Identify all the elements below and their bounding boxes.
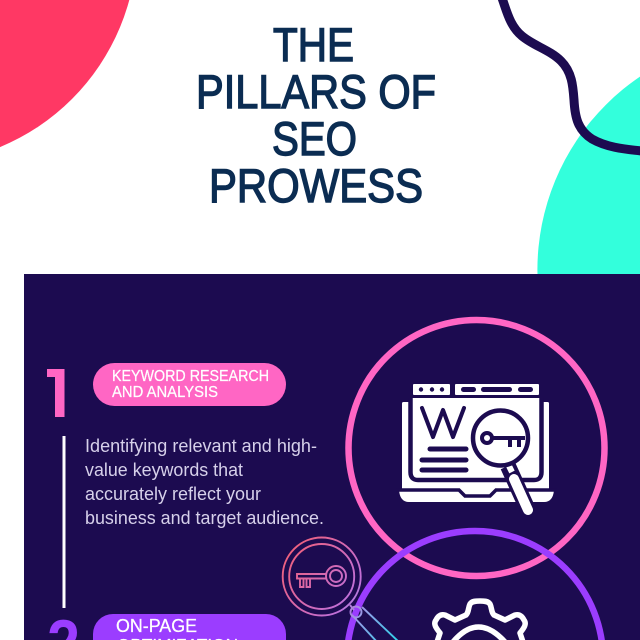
title: PILLARS OF xyxy=(196,65,436,118)
icon: gear xyxy=(435,601,525,640)
step 1 description xyxy=(85,436,324,528)
icon: laptop with keyword search xyxy=(396,384,557,510)
title: THE xyxy=(273,18,354,71)
step 1 description: Identifying relevant and high- xyxy=(85,436,317,456)
step 1 description: accurately reflect your xyxy=(85,484,261,504)
pink ring xyxy=(348,320,604,576)
decorative wavy line xyxy=(502,0,640,151)
step 1 description: business and target audience. xyxy=(85,508,324,528)
purple ring xyxy=(347,531,603,640)
title xyxy=(196,18,436,212)
step 2 heading pill: ON-PAGE xyxy=(116,616,197,636)
step 1 heading pill xyxy=(93,363,286,406)
decorative red circle xyxy=(0,0,137,164)
step 1 heading pill: AND ANALYSIS xyxy=(112,384,218,401)
step 2 heading pill xyxy=(93,614,286,640)
step 1 number: 1 xyxy=(42,356,80,432)
vertical divider line xyxy=(62,436,66,608)
step 1 description: value keywords that xyxy=(85,460,243,480)
decorative teal circle xyxy=(537,36,640,504)
icon: magnifier with key outline xyxy=(283,538,400,640)
step 1 number xyxy=(47,369,64,417)
title: PROWESS xyxy=(209,159,423,212)
panel: dark background xyxy=(24,274,640,640)
title: SEO xyxy=(272,112,357,165)
step 1 heading pill: KEYWORD RESEARCH xyxy=(112,368,269,385)
